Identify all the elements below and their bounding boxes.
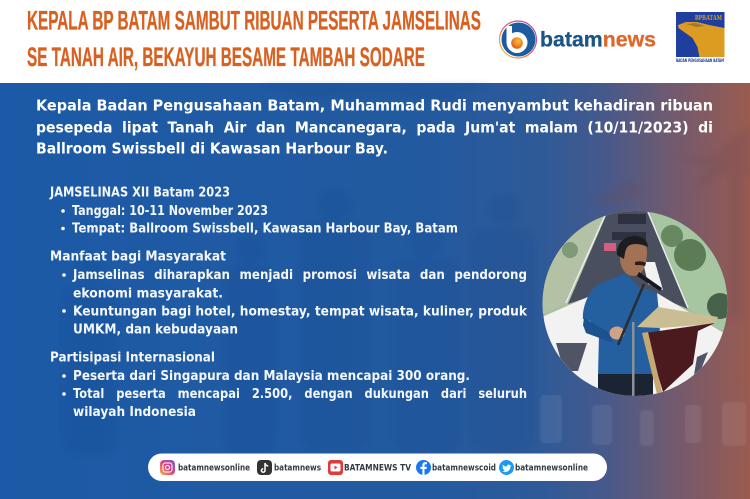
icon: youtube	[328, 460, 343, 475]
icon: twitter	[499, 460, 514, 475]
intro paragraph: Kepala Badan Pengusahaan Batam, Muhammad Rudi menyambut kehadiran ribuan	[36, 96, 713, 114]
text block: JAMSELINAS XII Batam 2023	[49, 186, 458, 237]
logo: batamnews	[500, 21, 656, 58]
intro paragraph	[36, 96, 713, 158]
title	[27, 6, 481, 72]
text block: Manfaat bagi Masyarakat: UMKM, dan kebudayaan	[73, 322, 238, 337]
text block: Manfaat bagi Masyarakat	[50, 250, 527, 337]
speaker figure	[583, 236, 660, 400]
title: SE TANAH AIR, BEKAYUH BESAME TAMBAH SODARE	[27, 42, 425, 72]
text block: Manfaat bagi Masyarakat: ekonomi masyarakat.	[73, 286, 223, 301]
logo: BP Batam	[676, 12, 724, 63]
text block: Manfaat bagi Masyarakat: Keuntungan bagi hotel, homestay, tempat wisata, kuliner, produk	[73, 304, 527, 319]
podium	[637, 307, 718, 394]
faded people silhouettes	[62, 83, 536, 456]
text block: Partisipasi Internasional: Total peserta mencapai 2.500, dengan dukungan dari seluruh	[73, 387, 527, 402]
social media bar: batamnewsonline	[515, 464, 588, 474]
logo: batamnews: batamnews	[540, 28, 656, 52]
photo: speaker at podium	[542, 211, 728, 396]
header band	[0, 0, 750, 83]
text block: Partisipasi Internasional: Partisipasi Internasional	[50, 351, 215, 366]
faded palm, right	[590, 127, 750, 320]
social media bar	[148, 454, 607, 481]
white plaza	[544, 293, 723, 396]
social media bar: batamnews	[274, 464, 321, 474]
text block: Partisipasi Internasional: Peserta dari Singapura dan Malaysia mencapai 300 orang.	[73, 369, 470, 384]
icon: tiktok	[257, 460, 272, 475]
faded shapes along bottom	[540, 395, 746, 446]
text block: Manfaat bagi Masyarakat: Manfaat bagi Masyarakat	[50, 250, 226, 265]
intro paragraph: Ballroom Swissbell di Kawasan Harbour Bay.	[36, 140, 388, 158]
logo: BP Batam: BADAN PENGUSAHAAN BATAM	[676, 58, 724, 63]
text block: JAMSELINAS XII Batam 2023: Tanggal: 10-11 November 2023	[72, 204, 268, 219]
social media bar: batamnewscoid	[432, 464, 496, 474]
microphone	[618, 272, 662, 396]
icon: instagram	[160, 460, 175, 475]
icon: facebook	[416, 460, 431, 475]
social media bar: BATAMNEWS TV	[344, 464, 411, 474]
intro paragraph: pesepeda lipat Tanah Air dan Mancanegara, pada Jum'at malam (10/11/2023) di	[36, 118, 713, 136]
logo: BP Batam: BPBATAM	[695, 14, 722, 22]
text block: JAMSELINAS XII Batam 2023: JAMSELINAS XII Batam 2023	[49, 186, 230, 201]
text block: Partisipasi Internasional: wilayah Indonesia	[73, 405, 196, 420]
text block: Partisipasi Internasional	[50, 351, 527, 420]
text block: JAMSELINAS XII Batam 2023: Tempat: Ballroom Swissbell, Kawasan Harbour Bay, Batam	[72, 222, 458, 237]
social media bar: batamnewsonline	[178, 464, 250, 474]
text block: Manfaat bagi Masyarakat: Jamselinas diharapkan menjadi promosi wisata dan pendorong	[72, 268, 527, 283]
